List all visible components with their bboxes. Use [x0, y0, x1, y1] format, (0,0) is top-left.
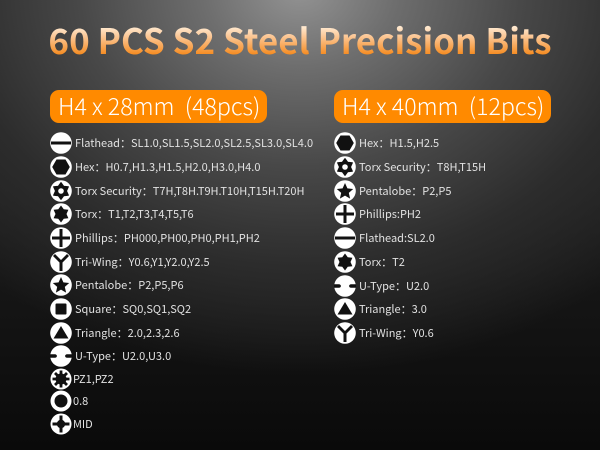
panel: 40mm bits: Torx：T2 [359, 254, 405, 270]
panel: 40mm bits: Hex：H1.5,H2.5 [359, 135, 439, 151]
heading: H4 x 40mm: H4 x 40mm (12pcs) [342, 88, 544, 122]
row: Torx [334, 251, 405, 273]
panel: 28mm bits: Flathead：SL1.0,SL1.5,SL2.0,SL2.5,SL3.0,SL4.0 [75, 135, 313, 151]
row: MID [50, 414, 93, 434]
row: Square [50, 298, 191, 320]
row: Tri-Wing [334, 322, 434, 344]
row: Phillips [50, 227, 260, 249]
panel: 40mm bits: Tri-Wing：Y0.6 [359, 325, 434, 341]
panel: 28mm bits: MID [73, 416, 93, 432]
row: Torx Security [50, 180, 305, 202]
panel: 40mm bits: Phillips:PH2 [359, 206, 421, 222]
row: Flathead [50, 132, 313, 154]
panel: 40mm bits: Pentalobe：P2,P5 [359, 183, 451, 199]
row: U-Type [334, 275, 429, 297]
panel: 28mm bits: Triangle：2.0,2.3,2.6 [75, 325, 180, 341]
row: 0.8 [50, 390, 88, 412]
row: Pentalobe [334, 180, 451, 202]
panel: 28mm bits [50, 88, 313, 434]
row: Hex [50, 156, 260, 178]
panel: 28mm bits: Torx：T1,T2,T3,T4,T5,T6 [75, 206, 194, 222]
row: Phillips [334, 203, 421, 225]
panel: 28mm bits: U-Type：U2.0,U3.0 [75, 348, 171, 364]
row: Triangle [334, 298, 427, 320]
panel: 40mm bits: U-Type：U2.0 [359, 278, 429, 294]
row: Triangle [50, 322, 180, 344]
panel: 28mm bits: Tri-Wing：Y0.6,Y1,Y2.0,Y2.5 [75, 254, 210, 270]
panel: 28mm bits: Square：SQ0,SQ1,SQ2 [75, 301, 191, 317]
panel: 40mm bits: Triangle：3.0 [359, 301, 427, 317]
panel: 28mm bits: Phillips：PH000,PH00,PH0,PH1,PH2 [75, 230, 260, 246]
panel: 40mm bits: Flathead:SL2.0 [359, 230, 435, 246]
row: Flathead [334, 227, 435, 249]
row: Tri-Wing [50, 251, 210, 273]
panel: 28mm bits: PZ1,PZ2 [73, 371, 114, 387]
row: Pentalobe [50, 274, 184, 296]
panel: 40mm bits: Torx Security：T8H,T15H [359, 159, 485, 175]
panel: 28mm bits: 0.8 [73, 393, 88, 409]
panel: 28mm bits: Torx Security：T7H,T8H.T9H.T10H,T15H.T20H [75, 183, 305, 199]
panel: 40mm bits [334, 88, 551, 344]
row: Torx Security [334, 156, 485, 178]
row: Hex [334, 132, 439, 154]
panel: 28mm bits: Pentalobe：P2,P5,P6 [75, 277, 184, 293]
row: U-Type [50, 345, 171, 367]
heading: H4 x 28mm: H4 x 28mm (48pcs) [58, 88, 260, 122]
row: Torx [50, 203, 194, 225]
panel: 28mm bits: Hex：H0.7,H1.3,H1.5,H2.0,H3.0,H4.0 [75, 159, 260, 175]
title: 60 PCS S2 Steel Precision Bits [48, 14, 552, 65]
row: PZ [50, 368, 114, 390]
